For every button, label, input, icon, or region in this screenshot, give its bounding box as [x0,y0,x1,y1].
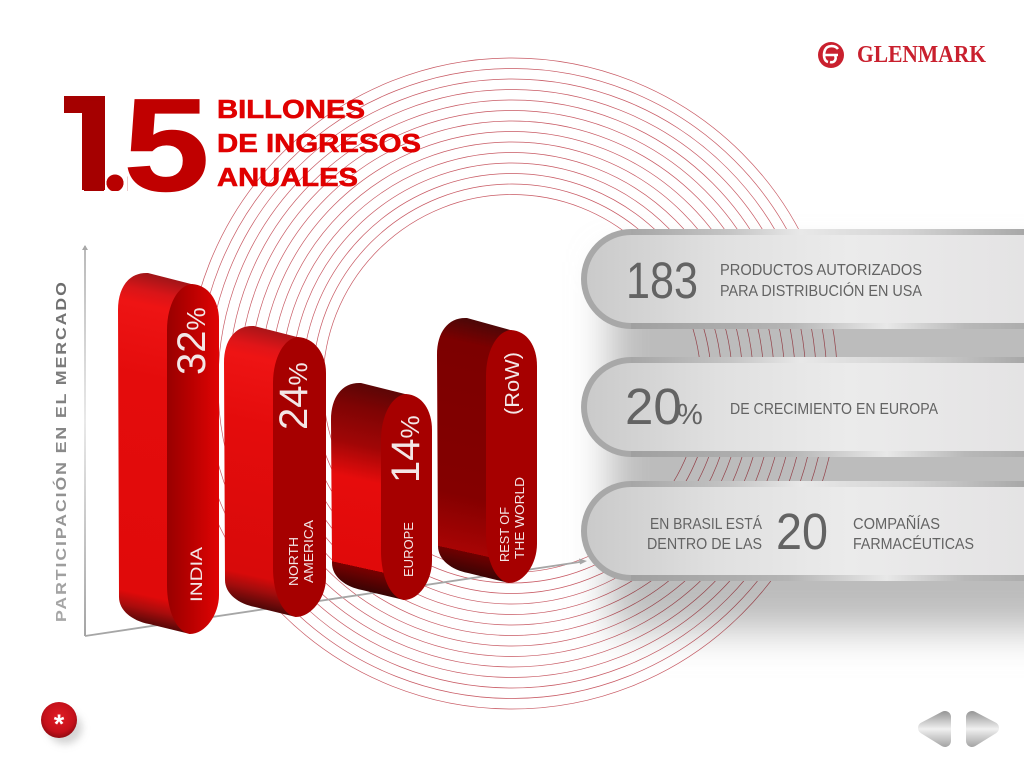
text: de crecimiento en Europa: DE CRECIMIENTO EN EUROPA [730,401,938,418]
label: India: INDIA [188,547,206,602]
label: RoW: (RoW) [502,352,524,415]
heading: billones de ingresos anuales: DE INGRESOS [217,128,421,158]
icon: next arrow [972,717,993,741]
label: Europe: EUROPE [402,522,416,577]
y-axis title: PARTICIPACIÓN EN EL MERCADO [52,282,70,622]
bar: Rest of the World [437,318,537,583]
big number 1.5 [64,96,206,192]
text: productos autorizados [720,262,922,300]
panel drop shadow [610,262,1024,630]
label: 14%: 14% [384,415,428,483]
panel: 20% crecimiento [581,357,1024,457]
icon: asterisk ball button [41,702,82,744]
number: 20%: % [677,399,703,431]
icon: asterisk ball button: * [54,709,65,739]
label: Rest of the World: REST OF [498,507,512,562]
text: productos autorizados: PARA DISTRIBUCIÓN EN USA [720,281,922,300]
number: 20%: 20 [625,378,682,435]
text: compañías farmacéuticas [853,513,974,553]
label: North America: NORTH [287,537,301,586]
label: 24%: 24% [272,362,316,430]
logo: Glenmark: GLENMARK [857,42,986,68]
label: North America: AMERICA [302,519,316,583]
bar: India 32% [118,273,219,634]
concentric ring pattern [186,58,838,709]
label: 32%: 32% [170,307,214,375]
heading: billones de ingresos anuales: ANUALES [217,162,358,192]
big number 1.5: . [94,72,137,219]
big number 1.5: 1 [45,72,131,219]
number: 20: 20 [776,503,828,560]
panel: 183 productos [581,229,1024,329]
text: compañías farmacéuticas: COMPAÑÍAS [853,513,940,533]
label: North America [287,519,316,586]
bar: Europe 14% [331,383,432,600]
heading: billones de ingresos anuales: BILLONES [217,94,365,124]
number: 183: 183 [626,252,698,309]
chart axes [82,245,587,636]
text: en Brasil está [647,514,762,553]
big number 1.5: 5 [124,72,209,219]
panel: Brasil 20 compañías [581,481,1024,581]
label: Rest of the World: THE WORLD [513,477,527,559]
text: en Brasil está: DENTRO DE LAS [647,536,762,553]
heading: billones de ingresos anuales [217,94,421,192]
label: Rest of the World [498,477,527,562]
text: compañías farmacéuticas: FARMACÉUTICAS [853,534,974,553]
text: productos autorizados: PRODUCTOS AUTORIZADOS [720,262,922,279]
icon: previous arrow [924,717,945,741]
text: en Brasil está: EN BRASIL ESTÁ [650,514,762,533]
bar: North America 24% [224,326,326,617]
